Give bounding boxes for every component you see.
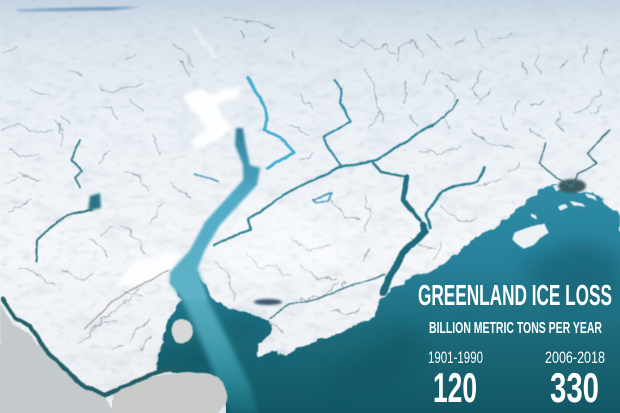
grey lower-left ice floe [0,304,115,413]
stream: far-right channels [540,130,610,187]
bright white snow patches [112,22,360,291]
stream: central branch north [323,80,350,165]
value: 330: 330 [550,364,599,411]
distant meltwater streak on horizon [15,7,142,11]
stream: right branch [427,167,485,228]
darker lake and pool shading [163,240,620,400]
stream: small lower channel [270,275,385,318]
stream: central diagonal channel [213,125,433,245]
dark ridge on ice [85,270,170,330]
stream: lower-left dark channel [3,299,175,395]
dark muddy outlet at delta [558,179,586,193]
period label: 1901-1990: 1901-1990 [428,348,483,367]
value: 120: 120 [433,364,477,411]
lower main river [170,268,258,413]
stream: upper channel [433,100,458,125]
ice flecks in lake [512,184,597,248]
stream: right wide channel [383,225,425,292]
stream: faint blue pond [195,173,218,182]
lake and central pool water [157,182,620,413]
upper main river [170,128,260,300]
left lake [88,193,101,211]
text block: ice loss figures [418,280,612,411]
streams and channels [3,77,610,395]
stream: right middle channel [403,177,420,220]
stream: right thin channel [373,163,407,177]
grey bottom ice floe [112,373,227,413]
ice island in pool [170,319,194,343]
stream: left lake outflow [36,209,92,262]
dark blue shadow on ice [254,299,282,305]
stream: bright blue tributary [247,77,295,168]
stream: left upper channel [72,140,82,188]
